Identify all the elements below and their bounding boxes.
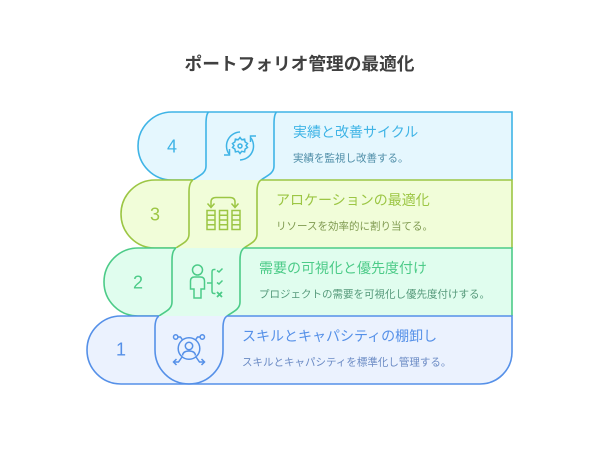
panel: step 3 [121,180,512,248]
tab outline: step 4 [193,112,276,180]
number 1: 1 [116,340,126,360]
description: step 4: 実績を監視し改善する。 [293,152,408,164]
icon: person in network [174,335,204,365]
icon: table with swap arrow [207,198,240,230]
tab outline: step 2 [159,248,244,316]
tab outline: step 3 [176,180,261,248]
heading: step 2: 需要の可視化と優先度付け [259,260,427,276]
panel: step 1 [87,316,512,384]
tab outline: step 1 [155,316,227,384]
heading: step 3: アロケーションの最適化 [276,192,430,208]
number 3: 3 [150,204,160,224]
icon: cycle gear [224,132,256,160]
title: ポートフォリオ管理の最適化 [185,53,415,74]
number 4: 4 [167,136,177,156]
icon: person with checklist [190,265,222,298]
description: step 1: スキルとキャパシティを標準化し管理する。 [242,356,451,368]
number 2: 2 [133,272,143,292]
panel: step 2 [104,248,512,316]
panel: step 4 [138,112,512,180]
description: step 3: リソースを効率的に割り当てる。 [276,220,433,232]
description: step 2: プロジェクトの需要を可視化し優先度付けする。 [259,288,490,300]
heading: step 4: 実績と改善サイクル [293,124,418,140]
heading: step 1: スキルとキャパシティの棚卸し [242,328,437,344]
